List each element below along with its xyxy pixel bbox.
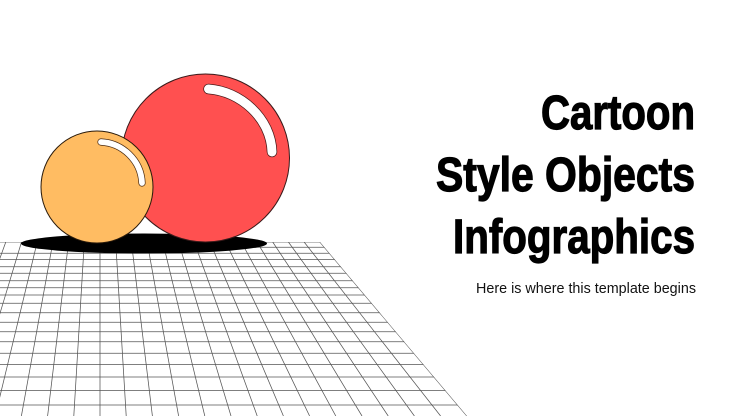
title: Infographics — [453, 211, 695, 264]
subtitle: Here is where this template begins — [476, 281, 696, 297]
perspective grid floor — [0, 242, 480, 416]
red sphere — [122, 74, 290, 242]
title: Cartoon — [541, 87, 695, 140]
title: Style Objects — [436, 149, 695, 202]
orange sphere — [41, 131, 153, 243]
ground shadow — [21, 234, 267, 254]
title — [436, 87, 695, 264]
